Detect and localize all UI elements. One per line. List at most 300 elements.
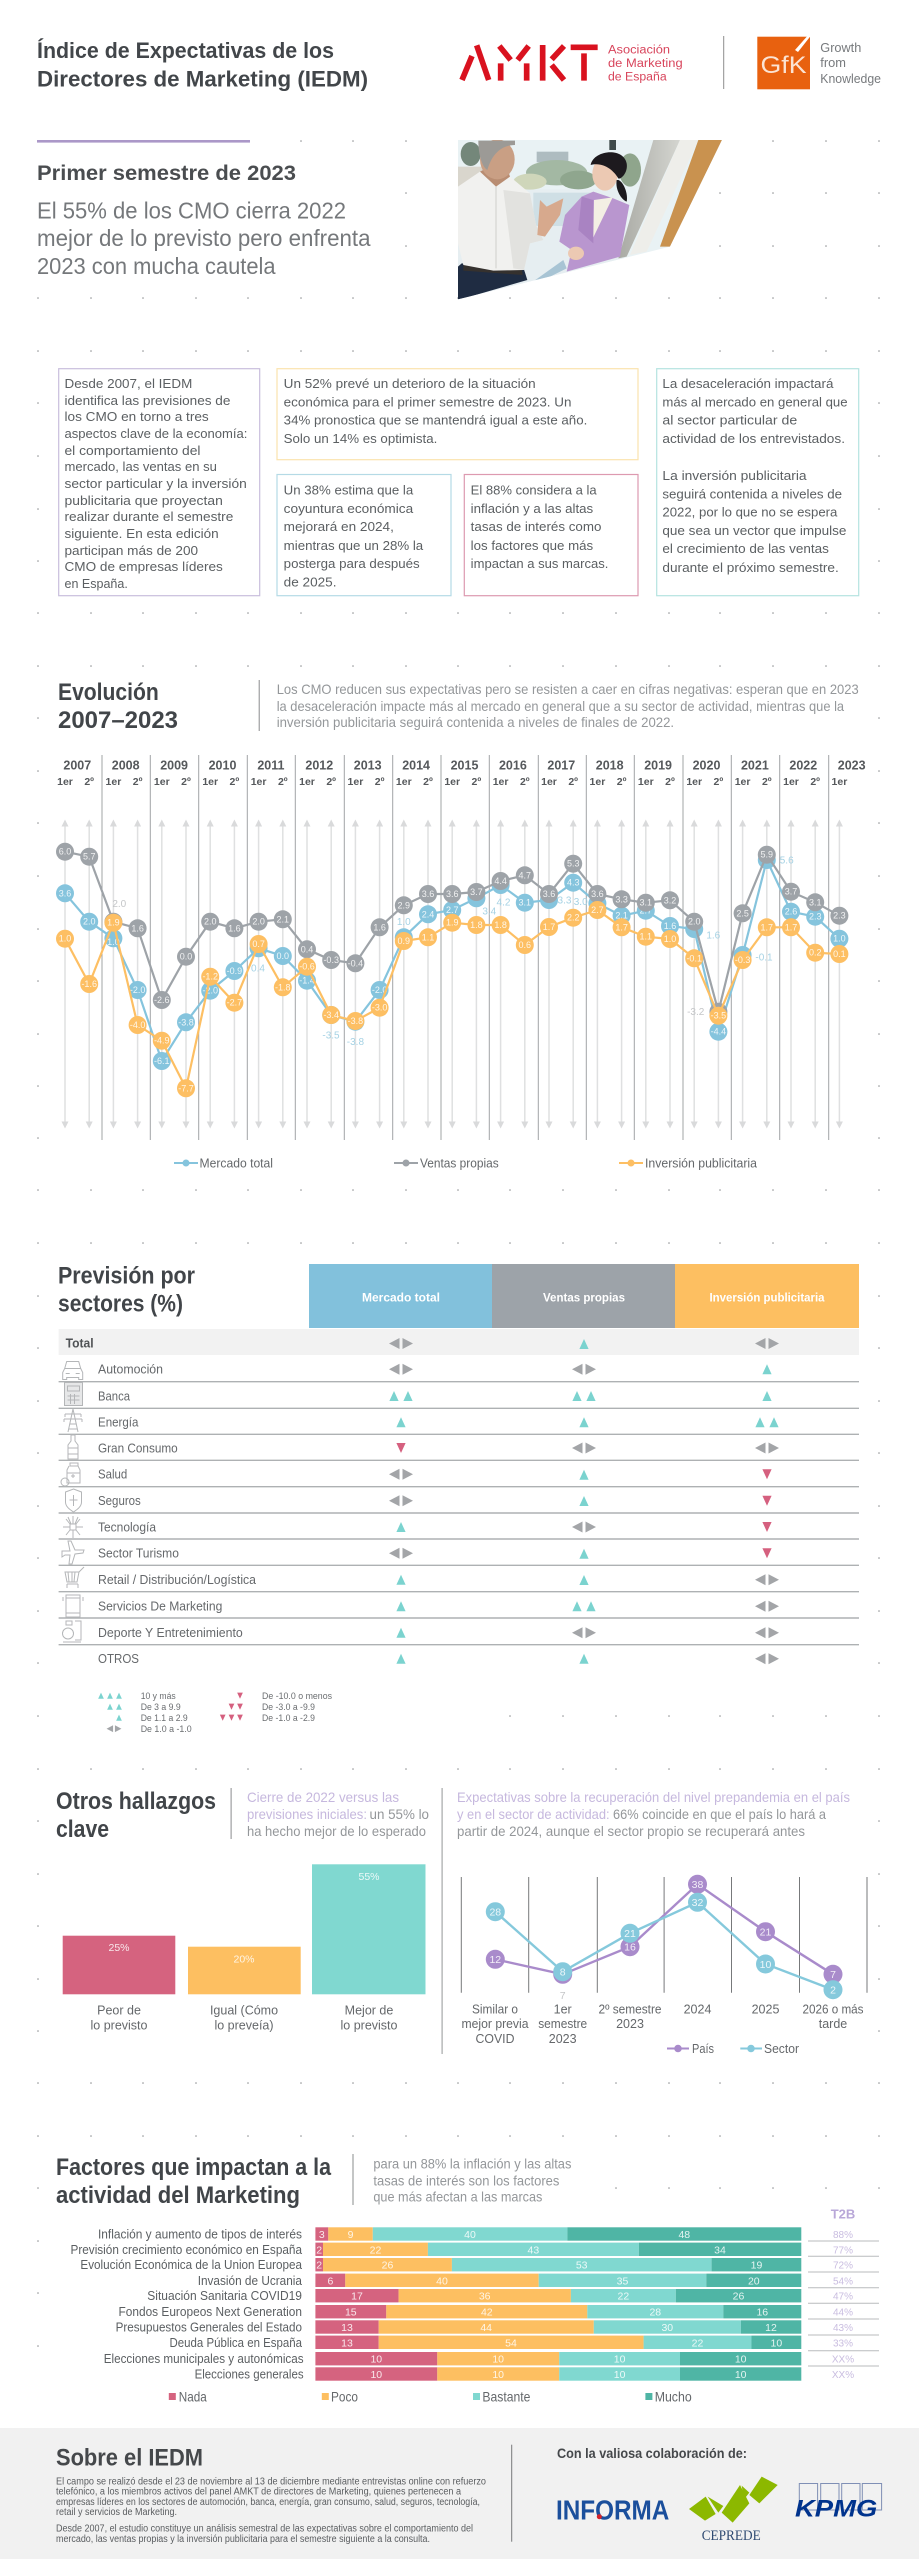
- series: ventas propias: 3.7: [470, 887, 483, 897]
- text: recuperación prepandemia: y en el sector de actividad:: [457, 1806, 610, 1822]
- series: inversión publicitaria: 1.1: [640, 932, 652, 942]
- table legend: De -3.0 a -9.9: [262, 1702, 315, 1713]
- heading: previsión por sectores: sectores (%): [58, 1290, 183, 1318]
- bar row: next generation: 42: [481, 2307, 493, 2319]
- series: inversión publicitaria: -4.0: [130, 1020, 145, 1030]
- bar chart: cierre 2022: Igual (Cómo: [210, 2004, 278, 2018]
- panel: sobre el IEDM: empresas líderes en los sectores de automoción, banca, energía, gran consumo, salud, seguros, tecnología,: [56, 2497, 480, 2508]
- bar row: COVID19: [147, 2288, 853, 2303]
- series: mercado total: -4.4: [711, 1027, 726, 1037]
- heading: evolución: 2007–2023: [58, 707, 178, 734]
- series: mercado total: 1.6: [664, 921, 676, 931]
- line chart: recuperación: Similar o: [472, 2002, 518, 2016]
- series: inversión publicitaria: -0.1: [686, 953, 702, 963]
- series: ventas propias: 3.6: [422, 889, 434, 899]
- bar row: elecciones generales: 10: [614, 2369, 626, 2381]
- year labels: 1er: [783, 776, 799, 788]
- row: deporte y entretenimiento: [62, 1621, 779, 1642]
- panel: 52% deterioro: económica para el primer semestre de 2023. Un: [284, 394, 572, 410]
- panel: desaceleración: 2022, por lo que no se espera: [662, 504, 838, 520]
- year labels: 2022: [789, 758, 817, 772]
- row: banca: Banca: [98, 1389, 130, 1403]
- line chart: recuperación: 2025: [752, 2002, 779, 2016]
- legend: factores: Nada: [179, 2388, 207, 2404]
- table legend: De 1.0 a -1.0: [141, 1724, 192, 1735]
- panel: intro IEDM: publicitaria que proyectan: [64, 493, 223, 508]
- series: sector: 8: [560, 1966, 566, 1978]
- row: servicios de marketing: Servicios De Marketing: [98, 1600, 222, 1614]
- bar row: COVID19: 17: [351, 2291, 363, 2303]
- year labels: 1er: [154, 776, 170, 788]
- year labels: 1er: [638, 776, 654, 788]
- bar row: deuda pública: [170, 2335, 853, 2350]
- year labels: 2º: [520, 776, 530, 788]
- row: retail: [65, 1567, 779, 1588]
- panel: sobre el IEDM: Sobre el IEDM: [56, 2444, 203, 2472]
- year labels: 2º: [714, 776, 723, 788]
- bar row: previsión crecimiento: 77%: [833, 2245, 853, 2256]
- year labels: 1er: [202, 776, 218, 788]
- bar row: next generation: 16: [756, 2307, 768, 2319]
- series: mercado total: -6.1: [154, 1056, 170, 1066]
- photo: two marketing professionals talking: [458, 139, 725, 300]
- line chart: recuperación: tarde: [819, 2017, 847, 2031]
- series: mercado total: -2.0: [372, 985, 387, 995]
- panel: 88% inflación: tasas de interés como: [471, 519, 601, 534]
- year labels: 2º: [472, 776, 481, 788]
- year labels: 1er: [493, 776, 508, 788]
- series: ventas propias: -0.3: [323, 955, 339, 965]
- bar row: elecciones municipales: XX%: [832, 2355, 854, 2366]
- series: mercado total: 5.6: [780, 856, 794, 866]
- series: mercado total: 3.1: [519, 898, 531, 908]
- series: ventas propias: -0.4: [348, 958, 363, 968]
- bar chart: cierre 2022: 55%: [358, 1871, 380, 1883]
- bar row: evolución UE: Evolución Económica de la Union Europea: [80, 2257, 303, 2272]
- bar row: Ucrania: 35: [617, 2275, 628, 2287]
- bar row: Ucrania: 20: [748, 2275, 760, 2287]
- year labels: 2017: [547, 758, 575, 772]
- line chart: recuperación: 2023: [616, 2017, 644, 2031]
- series: ventas propias: 3.2: [664, 895, 676, 905]
- panel: desaceleración: [657, 369, 859, 596]
- row: salud: [61, 1463, 772, 1486]
- series: inversión publicitaria: -3.4: [323, 1010, 339, 1020]
- series: ventas propias: 3.6: [591, 889, 604, 899]
- series: inversión publicitaria: -3.8: [348, 1016, 363, 1026]
- series: país: 38: [692, 1879, 703, 1891]
- bar row: deuda pública: 13: [341, 2337, 353, 2349]
- year labels: 1er: [686, 776, 702, 788]
- panel: desaceleración: al sector particular de: [662, 412, 797, 428]
- series: mercado total: -3.5: [322, 1030, 340, 1042]
- legend: factores: [169, 2388, 692, 2404]
- row: retail: Retail / Distribución/Logística: [98, 1573, 256, 1587]
- series: inversión publicitaria: -7.7: [178, 1083, 194, 1093]
- bar row: presupuestos: 43%: [833, 2323, 853, 2334]
- panel: 38% mejora 2024: coyuntura económica: [284, 501, 414, 516]
- bar row: elecciones generales: Elecciones generales: [195, 2366, 304, 2382]
- year labels: 2013: [354, 758, 382, 772]
- year labels: 2012: [305, 758, 333, 772]
- panel: intro IEDM: [59, 369, 260, 596]
- series: mercado total: 1.0: [397, 917, 411, 928]
- series: mercado total: 4.2: [497, 898, 511, 908]
- logo: AMKT: [462, 43, 683, 83]
- chart legend: país / sector: País: [692, 2042, 714, 2056]
- series: inversión publicitaria: 1.0: [59, 934, 71, 944]
- bar row: evolución UE: 19: [751, 2260, 762, 2272]
- panel: 88% inflación: impactan a sus marcas.: [471, 556, 608, 571]
- table legend: [98, 1691, 332, 1735]
- text: cierre de 2022: ha hecho mejor de lo esperado: [247, 1823, 426, 1839]
- headline: 2023 con mucha cautela: [37, 253, 276, 279]
- series: ventas propias: 0.0: [180, 952, 192, 962]
- T2B header: T2B: [831, 2206, 855, 2222]
- series: inversión publicitaria: 1.9: [446, 918, 458, 928]
- bar row: presupuestos: 44: [480, 2322, 492, 2334]
- text: recuperación prepandemia: Expectativas sobre la recuperación del nivel prepandemia en el país: [457, 1789, 850, 1805]
- series: mercado total: -0.1: [755, 953, 773, 964]
- bar row: evolución UE: [80, 2257, 853, 2272]
- panel: sobre el IEDM: Desde 2007, el estudio constituye un análisis semestral de las expectativas sobre el comportamiento del: [56, 2524, 473, 2534]
- series: ventas propias: 2.0: [112, 899, 127, 910]
- bar row: previsión crecimiento: [70, 2242, 853, 2257]
- logo: AMKT: de Marketing: [608, 56, 683, 70]
- row: servicios de marketing: [63, 1595, 779, 1617]
- series: sector: 32: [692, 1897, 703, 1909]
- chart legend: país / sector: Sector: [764, 2042, 799, 2056]
- series: ventas propias: 2.3: [833, 911, 846, 921]
- year labels: 2007: [63, 758, 91, 772]
- text: cierre de 2022: Cierre de 2022 versus las: [247, 1789, 399, 1805]
- headline: mejor de lo previsto pero enfrenta: [37, 225, 371, 251]
- heading: previsión por sectores: [58, 1262, 195, 1318]
- series: mercado total: 3.6: [59, 888, 71, 898]
- series: mercado total: 2.7: [640, 906, 652, 916]
- bar row: COVID19: 36: [479, 2291, 491, 2303]
- heading: evolución: [58, 679, 178, 734]
- series: mercado total: 4.3: [567, 878, 579, 888]
- panel: 52% deterioro: [277, 369, 638, 460]
- panel: sobre el IEDM: [0, 2428, 919, 2559]
- series: ventas propias: 2.9: [398, 900, 410, 910]
- series: mercado total: 3.4: [482, 906, 497, 918]
- subtitle: primer semestre: Primer semestre de 2023: [37, 162, 296, 185]
- year labels: 2009: [160, 758, 188, 772]
- year labels: 1er: [106, 776, 121, 788]
- bar row: Ucrania: [198, 2273, 853, 2288]
- accent rule: [37, 140, 250, 143]
- bar row: evolución UE: 53: [576, 2260, 588, 2272]
- year labels: 2º: [181, 776, 191, 788]
- series: mercado total: 1.0: [833, 934, 846, 944]
- line chart: recuperación: 2026 o más: [802, 2002, 864, 2016]
- panel: desaceleración: seguirá contenida a niveles de: [662, 486, 842, 502]
- series: ventas propias: 5.9: [761, 850, 773, 860]
- heading: factores: actividad del Marketing: [56, 2182, 300, 2209]
- bar row: elecciones generales: 10: [370, 2369, 382, 2381]
- series: mercado total: [56, 851, 848, 1070]
- bar row: previsión crecimiento: Previsión crecimiento económico en España: [70, 2242, 303, 2257]
- series: inversión publicitaria: 1.8: [470, 920, 483, 930]
- logo: GfK: [757, 33, 881, 89]
- year labels: 2023: [838, 758, 866, 772]
- series: ventas propias: -3.2: [687, 1007, 705, 1018]
- bar row: previsión crecimiento: 22: [370, 2244, 381, 2256]
- panel: 38% mejora 2024: de 2025.: [284, 574, 336, 590]
- table header: ventas propias: Ventas propias: [543, 1290, 625, 1304]
- panel: sobre el IEDM: mercado, las ventas propias y la inversión publicitaria para el semestre siguiente a la consulta.: [56, 2534, 430, 2545]
- chart legend: [174, 1156, 758, 1170]
- bar row: COVID19: 47%: [833, 2292, 853, 2303]
- series: ventas propias: 5.3: [567, 859, 579, 869]
- line chart: recuperación: semestre: [538, 2017, 587, 2031]
- series: país: 16: [624, 1942, 636, 1954]
- series: ventas propias: 3.1: [809, 897, 821, 907]
- series: mercado total: -1.4: [299, 976, 315, 986]
- panel: 38% mejora 2024: mejorará en 2024,: [284, 519, 394, 534]
- year labels: 2014: [402, 758, 430, 772]
- bar row: next generation: 44%: [833, 2308, 853, 2319]
- row: energía: [64, 1409, 779, 1432]
- series: mercado total: 2.4: [422, 909, 434, 919]
- heading: evolución: Evolución: [58, 679, 159, 706]
- year labels: 1er: [348, 776, 363, 788]
- series: ventas propias: 1.6: [373, 922, 386, 932]
- panel: desaceleración: La inversión publicitaria: [662, 468, 807, 483]
- series: inversión publicitaria: -1.6: [81, 979, 97, 989]
- series: país: 7: [830, 1969, 836, 1981]
- year labels: 2015: [451, 758, 478, 772]
- bar row: Ucrania: Invasión de Ucrania: [198, 2273, 303, 2288]
- year labels: 2020: [693, 758, 720, 772]
- bar row: evolución UE: 26: [382, 2260, 393, 2272]
- year labels: 2º: [665, 776, 675, 788]
- bar row: Ucrania: 6: [327, 2275, 333, 2287]
- bar row: presupuestos: [116, 2320, 853, 2334]
- panel: intro IEDM: Desde 2007, el IEDM: [64, 376, 192, 391]
- line chart: recuperación: [461, 1875, 867, 2046]
- bar chart: cierre 2022: lo previsto: [91, 2018, 148, 2032]
- headline: [37, 198, 371, 279]
- text: factores intro: para un 88% la inflación y las altas: [373, 2156, 571, 2172]
- bar row: elecciones generales: 10: [735, 2369, 747, 2381]
- series: mercado total: 1.0: [107, 937, 120, 947]
- bar chart: cierre 2022: Mejor de: [345, 2004, 393, 2018]
- series: inversión publicitaria: 1.7: [761, 922, 773, 932]
- row: automoción: [63, 1362, 772, 1380]
- chart legend: Inversión publicitaria: [645, 1156, 758, 1170]
- panel: desaceleración: durante el próximo semestre.: [662, 560, 839, 575]
- series: mercado total: 2.1: [615, 911, 628, 921]
- panel: desaceleración: el crecimiento de las ventas: [662, 541, 829, 556]
- series: mercado total: 2.0: [83, 917, 95, 927]
- series: inversión publicitaria: 0.1: [833, 949, 846, 959]
- bar row: elecciones municipales: 10: [735, 2354, 747, 2366]
- line chart: recuperación: COVID: [476, 2032, 514, 2046]
- legend: factores: Bastante: [482, 2388, 531, 2404]
- series: inversión publicitaria: -3.0: [372, 1003, 387, 1013]
- text: factores intro: [373, 2156, 571, 2205]
- table header: inversión publicitaria: [675, 1264, 859, 1328]
- logo: GfK: Growth: [820, 40, 861, 55]
- logo: GfK: GfK: [760, 52, 806, 79]
- text: factores intro: que más afectan a las marcas: [373, 2189, 542, 2205]
- row: salud: Salud: [98, 1468, 127, 1482]
- year labels: 2º: [810, 776, 820, 788]
- chart legend: país / sector: [667, 2042, 799, 2056]
- year labels: 1er: [57, 776, 73, 788]
- panel: 88% inflación: inflación y a las altas: [471, 501, 594, 516]
- year labels: 2º: [230, 776, 239, 788]
- bar row: deuda pública: 54: [505, 2337, 517, 2349]
- bar row: evolución UE: 72%: [833, 2261, 853, 2272]
- logo: AMKT: de España: [608, 69, 667, 83]
- title: [37, 38, 368, 92]
- series: sector: 2: [830, 1984, 836, 1996]
- bar row: inflación: 40: [464, 2229, 476, 2241]
- bar row: elecciones municipales: Elecciones municipales y autonómicas: [104, 2351, 304, 2366]
- series: mercado total: 2.7: [446, 905, 458, 915]
- series: ventas propias: 3.6: [446, 889, 458, 899]
- bar row: COVID19: 26: [733, 2291, 744, 2303]
- stacked bar chart: factores: [70, 2226, 879, 2382]
- year labels: [57, 758, 866, 788]
- logo: GfK: from: [820, 55, 846, 70]
- year labels: 1er: [541, 776, 557, 788]
- year labels: 2º: [326, 776, 336, 788]
- bar row: inflación: 3: [319, 2229, 325, 2241]
- title: Índice de Expectativas de los: [37, 38, 334, 63]
- logo: CEPREDE: CEPREDE: [702, 2528, 761, 2544]
- heading: previsión por sectores: Previsión por: [58, 1262, 195, 1290]
- bar row: presupuestos: 30: [661, 2322, 673, 2334]
- bar row: deuda pública: 22: [692, 2337, 703, 2349]
- series: mercado total: 3.3: [558, 896, 572, 906]
- series: país: 12: [489, 1954, 501, 1966]
- heading: factores: Factores que impactan a la: [56, 2154, 332, 2181]
- table header: mercado total: Mercado total: [362, 1290, 440, 1304]
- series: ventas propias: 1.6: [131, 923, 144, 933]
- heading: otros hallazgos: Otros hallazgos: [56, 1788, 216, 1815]
- year labels: 2011: [257, 758, 285, 772]
- bar row: elecciones generales: 10: [492, 2369, 504, 2381]
- bar row: Ucrania: 54%: [833, 2276, 853, 2287]
- series: ventas propias: 3.7: [785, 887, 797, 897]
- panel: intro IEDM: aspectos clave de la economía:: [64, 426, 247, 441]
- panel: 52% deterioro: Un 52% prevé un deterioro de la situación: [284, 376, 536, 391]
- series: inversión publicitaria: 2.7: [591, 905, 604, 915]
- panel: desaceleración: más al mercado en general que: [662, 394, 848, 410]
- series: ventas propias: 0.4: [301, 944, 313, 954]
- year labels: 2º: [568, 776, 578, 788]
- series: mercado total: 3.0: [574, 897, 588, 908]
- panel: sobre el IEDM: retail y servicios de Marketing.: [56, 2507, 177, 2518]
- panel: intro IEDM: en España.: [64, 576, 128, 591]
- headline: El 55% de los CMO cierra 2022: [37, 198, 346, 224]
- row: seguros: Seguros: [98, 1494, 141, 1508]
- table legend: De -10.0 o menos: [262, 1691, 332, 1702]
- series: inversión publicitaria: -1.2: [202, 972, 218, 982]
- bar chart: cierre 2022: 20%: [233, 1954, 255, 1966]
- series: inversión publicitaria: 2.2: [567, 913, 579, 923]
- year labels: 1er: [299, 776, 315, 788]
- series: ventas propias: 2.0: [688, 917, 700, 927]
- bar chart: cierre 2022: [63, 1864, 425, 2032]
- row: gran consumo: [68, 1435, 779, 1459]
- bar chart: cierre 2022: 25%: [108, 1942, 130, 1954]
- bar row: presupuestos: Presupuestos Generales del Estado: [116, 2320, 302, 2334]
- bar row: inflación: 88%: [833, 2230, 853, 2241]
- year labels: 1er: [251, 776, 266, 788]
- bar row: next generation: 28: [649, 2307, 661, 2319]
- title: Directores de Marketing (IEDM): [37, 66, 368, 92]
- series: inversión publicitaria: 0.7: [252, 939, 265, 949]
- year labels: 2018: [596, 758, 624, 772]
- bar row: elecciones municipales: 10: [614, 2354, 626, 2366]
- year labels: 2º: [133, 776, 143, 788]
- year labels: 1er: [590, 776, 605, 788]
- table legend: 10 y más: [141, 1691, 176, 1702]
- year labels: 2º: [617, 776, 627, 788]
- panel: 88% inflación: [464, 474, 638, 596]
- series: sector: 28: [489, 1906, 501, 1918]
- heading: colaboradores: Con la valiosa colaboración de:: [557, 2445, 747, 2461]
- series: sector: 10: [760, 1959, 771, 1971]
- text: recuperación prepandemia: 66% coincide en que el país lo hará a: [613, 1806, 826, 1822]
- series: mercado total: -2.0: [130, 985, 145, 995]
- series: ventas propias: 5.7: [83, 852, 95, 862]
- table legend: De 1.1 a 2.9: [141, 1713, 188, 1724]
- logo: KPMG: KPMG: [795, 2496, 877, 2523]
- logo: INFORMA: INFORMA: [556, 2494, 669, 2525]
- bar row: Ucrania: 40: [436, 2275, 448, 2287]
- series: ventas propias: [56, 843, 848, 1021]
- series: país: [486, 1875, 842, 1984]
- year labels: 2º: [762, 776, 772, 788]
- row: sector turismo: Sector Turismo: [98, 1547, 179, 1561]
- series: país: 21: [760, 1926, 771, 1938]
- year labels: 1er: [396, 776, 412, 788]
- table header: ventas propias: [492, 1264, 675, 1328]
- text: recuperación prepandemia: [457, 1789, 850, 1839]
- row: sector turismo: [62, 1541, 772, 1564]
- year labels: 2º: [423, 776, 433, 788]
- series: mercado total: 2.6: [785, 907, 797, 917]
- panel: intro IEDM: identifica las previsiones de: [64, 393, 230, 408]
- bar chart: cierre 2022: lo previsto: [341, 2018, 398, 2032]
- series: inversión publicitaria: -2.7: [227, 998, 242, 1008]
- series: inversión publicitaria: 1.0: [664, 934, 676, 944]
- panel: 38% mejora 2024: [277, 474, 451, 596]
- row: total: [59, 1329, 859, 1355]
- line chart: recuperación: 2024: [684, 2002, 711, 2016]
- year labels: 2016: [499, 758, 527, 772]
- year labels: 1er: [444, 776, 460, 788]
- heading: otros hallazgos: [56, 1788, 216, 1843]
- row: banca: [64, 1382, 772, 1406]
- panel: intro IEDM: el comportamiento del: [64, 443, 201, 458]
- year labels: 2019: [644, 758, 672, 772]
- series: inversión publicitaria: [56, 901, 848, 1097]
- row: otros: OTROS: [98, 1652, 139, 1666]
- bar row: inflación: 9: [348, 2229, 354, 2241]
- bar row: presupuestos: 13: [341, 2322, 353, 2334]
- bar row: deuda pública: 10: [771, 2337, 782, 2349]
- series: inversión publicitaria: -3.5: [711, 1011, 726, 1021]
- panel: intro IEDM: sector particular y la inversión: [64, 476, 247, 491]
